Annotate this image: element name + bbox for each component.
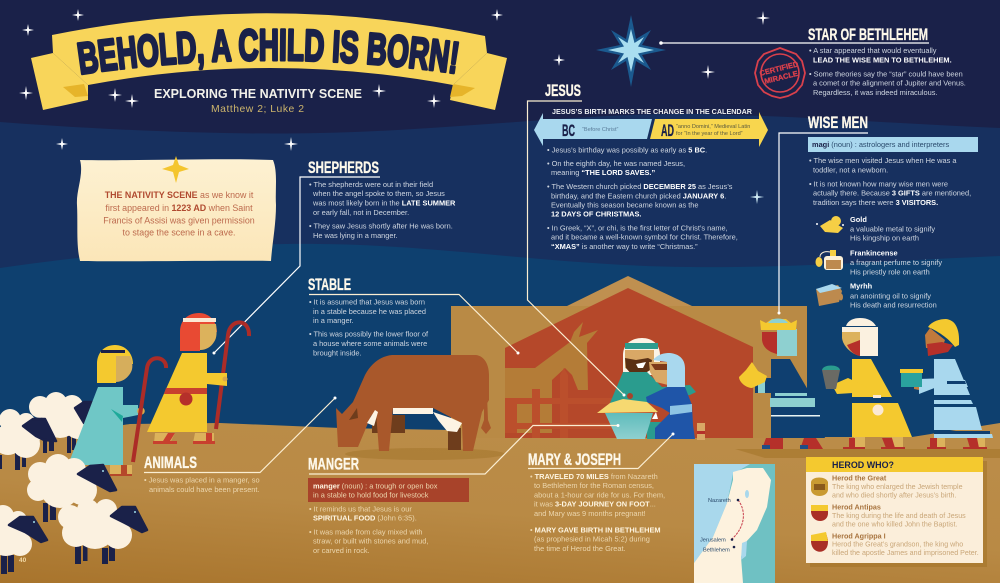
arm	[919, 378, 968, 394]
Herod the Great: The king who enlarged the Jewish temple	[832, 483, 963, 491]
arrow: AD: for “In the year of the Lord”	[676, 131, 743, 137]
red interior wall	[505, 288, 753, 438]
feet	[110, 465, 132, 476]
panel: Mary and Joseph text: to Bethlehem for the Roman census,	[534, 481, 654, 490]
map: Bethlehem	[703, 548, 730, 554]
belt	[670, 404, 692, 415]
panel: manger text: straw, or built with stones and mud,	[313, 536, 428, 546]
panel: wise men text: • It is not known how many wise men were	[809, 180, 948, 188]
panel: stable text: • It is assumed that Jesus was born	[309, 298, 425, 306]
sheep bottom-left	[0, 505, 47, 574]
panel: star of Bethlehem text: • A star appeared that would eventually	[809, 46, 937, 55]
sandal	[697, 423, 705, 440]
shadow	[810, 461, 987, 567]
robe	[68, 387, 123, 465]
banner left tail	[31, 53, 88, 110]
sheep front bottom-right	[58, 499, 147, 564]
panel: Herod who: HEROD WHO?	[832, 460, 894, 470]
staff	[133, 358, 166, 462]
gold: His kingship on earth	[850, 234, 919, 242]
wise man 3 blue	[900, 319, 993, 449]
panel: shepherds text: He was lying in a manger.	[313, 231, 398, 240]
panel: shepherds text	[308, 158, 456, 240]
Jesus bullet text	[547, 146, 738, 251]
manger definition box	[308, 478, 469, 502]
robe	[610, 372, 696, 403]
subtitle: EXPLORING THE NATIVITY SCENE	[154, 86, 362, 101]
arrow: BC: “Before Christ”	[582, 127, 619, 133]
panel: stable text: in a stable because he was placed	[313, 307, 426, 316]
panel: star of Bethlehem text: Regardless, it was indeed miraculous.	[813, 88, 937, 97]
myrrh: Myrhh	[850, 282, 873, 290]
Jesus bullet text: birthday, and the Eastern church picked JANUARY 6.	[551, 192, 726, 200]
panel: manger text: in a stable to hold food for livestock	[313, 490, 429, 500]
leader: star	[661, 42, 929, 44]
Jesus bullet text: “XMAS” is another way to write “Christmas.”	[551, 242, 698, 251]
panel: star of Bethlehem text: • Some theories say the “star” could have been	[809, 70, 963, 78]
panel: wise men text: magi (noun) : astrologers and interpreters	[812, 140, 950, 149]
gift	[822, 370, 840, 389]
arrow: BC: BC	[562, 121, 575, 140]
gold: a valuable metal to signify	[850, 224, 935, 234]
sheep front middle	[27, 454, 116, 522]
panel: shepherds text: or early fall, not in December.	[313, 208, 409, 217]
small stars	[19, 9, 770, 204]
panel: animals text: • Jesus was placed in a manger, so	[144, 476, 260, 484]
arm	[832, 378, 867, 394]
dead sea	[741, 541, 747, 560]
frankincense: a fragrant perfume to signify	[850, 258, 942, 267]
Herod Agrippa I: killed the apostle James and imprisoned Peter.	[832, 549, 979, 557]
hand	[137, 407, 145, 415]
myrrh: His death and resurrection	[850, 300, 937, 310]
cow ground shadow	[345, 448, 505, 460]
feet	[854, 437, 903, 447]
icon: head	[811, 505, 828, 521]
scripture reference: Matthew 2; Luke 2	[211, 104, 304, 115]
veil	[653, 353, 685, 388]
banner main ribbon	[52, 13, 487, 85]
panel: Mary and Joseph text: it was 3-DAY JOURNEY ON FOOT...	[534, 500, 656, 508]
leader: Mary and Joseph	[528, 434, 673, 468]
arrow: AD: AD	[661, 121, 674, 140]
panel: stable text: brought inside.	[313, 348, 361, 358]
Herod Antipas: The king during the life and death of Jesus	[832, 512, 966, 520]
panel: stable text	[308, 275, 429, 358]
gold: Gold	[850, 215, 867, 224]
panel: wise men text: WISE MEN	[808, 113, 868, 132]
robe	[934, 359, 970, 395]
panel: star of Bethlehem text: a comet or the alignment of Jupiter and Venus.	[813, 78, 966, 88]
panel: star of Bethlehem text	[808, 25, 966, 97]
head	[846, 318, 876, 326]
icon: myrrh oil jar	[816, 284, 843, 306]
feet	[762, 438, 823, 449]
Jesus bullet text: 12 DAYS OF CHRISTMAS.	[551, 210, 641, 218]
panel: animals text: animals could have been present.	[149, 485, 260, 494]
leader: stable	[309, 294, 518, 353]
panel: manger text: MANGER	[308, 454, 359, 474]
scroll text: first appeared in 1223 AD when Saint	[105, 203, 253, 213]
head	[180, 313, 217, 351]
leader: manger	[309, 426, 618, 474]
panel: stable text: in a manger.	[313, 316, 354, 325]
panel: Mary and Joseph text: (as prophesied in Micah 5:2) during	[534, 534, 650, 544]
scroll text	[103, 190, 255, 238]
frankincense	[816, 248, 942, 276]
Jesus bullet text: • In Greek, “X”, or chi, is the first letter of Christ’s name,	[547, 224, 728, 232]
page number: 40	[19, 557, 27, 564]
panel: wise men text: • The wise men visited Jesus when He was a	[809, 156, 957, 165]
robe	[771, 359, 825, 438]
panel: shepherds text: • They saw Jesus shortly after He was born.	[309, 222, 453, 230]
Joseph	[610, 338, 696, 403]
panel: stable text: STABLE	[308, 275, 351, 294]
panel: wise men text: tradition says there were 3 VISITORS.	[813, 198, 938, 207]
panel: manger text: • It reminds us that Jesus is our	[309, 504, 412, 514]
shepherd in yellow robe	[147, 313, 249, 444]
panel: stable text: a house where some animals were	[313, 339, 427, 348]
cow ear	[349, 408, 358, 420]
wise men figures	[735, 318, 1000, 458]
staff	[216, 322, 249, 429]
sheep mid-left	[0, 409, 56, 470]
banner right tail	[450, 53, 507, 110]
magi definition box	[808, 137, 978, 152]
headscarf	[623, 338, 660, 375]
scroll text: to stage the scene in a cave.	[123, 228, 235, 238]
horse silhouette	[505, 322, 598, 433]
cow	[336, 355, 505, 460]
map	[694, 464, 775, 583]
title text: BEHOLD, A CHILD IS BORN!	[76, 28, 460, 76]
Herod Agrippa I: Herod Agrippa I	[832, 532, 886, 540]
sea	[694, 464, 750, 563]
robe	[147, 353, 207, 432]
Herod the Great	[811, 474, 963, 500]
panel: wise men text	[808, 113, 978, 310]
panel: Mary and Joseph text: and Mary was 9 months pregnant!	[534, 509, 646, 518]
wise man 2 yellow	[822, 318, 912, 449]
panel: Jesus: JESUS	[545, 81, 581, 100]
panel: Mary and Joseph text: MARY & JOSEPH	[528, 450, 621, 469]
leader: wise men	[779, 133, 868, 313]
panel: shepherds text: when the angel spoke to them, so Jesus	[312, 189, 445, 198]
leader: shepherds	[214, 177, 380, 353]
icon: head	[811, 478, 828, 496]
Herod Antipas	[811, 502, 966, 528]
far legs	[372, 415, 461, 450]
robe	[852, 359, 912, 437]
icon: certified miracle seal	[755, 48, 805, 98]
leader: animals	[144, 398, 335, 472]
banner folds	[63, 84, 475, 97]
fence	[505, 368, 612, 438]
map: Jerusalem	[700, 538, 726, 544]
belt	[164, 388, 207, 394]
panel: Jesus	[534, 81, 768, 251]
belly white	[367, 408, 462, 432]
Herod the Great: Herod the Great	[832, 474, 887, 482]
panel: wise men text: actually there. Because 3 GIFTS are mentioned,	[813, 188, 971, 198]
panel: Mary and Joseph text: the time of Herod the Great.	[534, 544, 626, 553]
panel: manger text: manger (noun) : a trough or open box	[313, 482, 438, 490]
map: Nazareth	[708, 498, 731, 504]
panel: Mary and Joseph text: • MARY GAVE BIRTH IN BETHLEHEM	[530, 526, 661, 534]
pouch	[180, 392, 192, 406]
cities	[737, 499, 739, 501]
panel: manger text	[308, 454, 469, 555]
Herod Agrippa I	[811, 532, 979, 557]
shepherd in teal robe	[68, 345, 166, 476]
arrow: AD: “anno Domini,” Medieval Latin	[676, 124, 750, 130]
Herod Antipas: Herod Antipas	[832, 502, 881, 512]
panel: Herod who	[806, 457, 987, 567]
panel: manger text: or carved in rock.	[313, 546, 370, 555]
leader: Jesus	[528, 101, 624, 395]
Jesus bullet text: • Jesus’s birthday was possibly as early as 5 BC.	[547, 146, 707, 154]
gift	[900, 369, 923, 373]
panel: Mary and Joseph text: • TRAVELED 70 MILES from Nazareth	[530, 472, 658, 481]
icon: scroll star	[162, 156, 189, 183]
wise man 1 navy	[739, 318, 825, 449]
panel: nativity scene scroll	[77, 156, 276, 261]
panel: animals text: ANIMALS	[144, 453, 197, 472]
beard	[625, 358, 652, 375]
panel: stable building	[451, 276, 807, 438]
header	[806, 457, 983, 472]
gold	[816, 215, 935, 242]
icon: gold	[816, 216, 844, 233]
roof	[567, 276, 692, 306]
frankincense: His priestly role on earth	[850, 268, 930, 276]
feet	[154, 433, 214, 443]
panel: shepherds text: was most likely born in the LATE SUMMER	[312, 198, 456, 208]
Herod the Great: and who died shortly after Jesus’s birth.	[832, 492, 956, 500]
feet	[937, 437, 985, 447]
myrrh: an anointing oil to signify	[850, 292, 931, 300]
robe	[646, 387, 695, 439]
arrow: AD	[650, 112, 768, 147]
panel: shepherds text: • The shepherds were out in their field	[309, 180, 433, 189]
Herod Agrippa I: Herod the Great’s grandson, the king who	[832, 540, 963, 548]
gift bowl	[739, 362, 767, 388]
body	[336, 355, 489, 451]
Mary	[646, 353, 705, 440]
head	[762, 332, 777, 354]
Herod Antipas: and the one who killed John the Baptist.	[832, 520, 957, 528]
frankincense: Frankincense	[850, 248, 898, 258]
panel: star of Bethlehem text: LEAD THE WISE MEN TO BETHLEHEM.	[813, 56, 952, 64]
icon: certified miracle seal: CERTIFIED	[759, 59, 800, 78]
manger with straw	[597, 393, 658, 439]
face	[649, 362, 668, 385]
teal under	[647, 422, 662, 439]
myrrh	[816, 282, 937, 310]
scroll text: Francis of Assisi was given permission	[103, 216, 255, 226]
turban	[928, 319, 959, 347]
panel: manger text: • It was made from clay mixed with	[309, 528, 422, 536]
panel: Mary and Joseph text: about a 1-hour car ride for us. For them,	[534, 490, 665, 500]
leader dots	[212, 41, 780, 435]
face	[625, 350, 654, 375]
panel: wise men text: toddler, not a newborn.	[813, 166, 888, 174]
panel: stable text: • This was possibly the lower floor of	[309, 330, 429, 338]
head	[925, 328, 945, 348]
Jesus bullet text: • On the eighth day, he was named Jesus,	[547, 159, 685, 168]
panel: star of Bethlehem text: STAR OF BETHLEHEM	[808, 25, 928, 44]
crown	[760, 319, 797, 330]
panel: Mary and Joseph text	[528, 450, 665, 553]
icon: star of Bethlehem	[596, 15, 666, 87]
icon: certified miracle seal: MIRACLE	[763, 69, 799, 86]
arm	[755, 378, 772, 393]
panel: manger text: SPIRITUAL FOOD (John 6:35).	[313, 514, 417, 522]
icon: frankincense bottle	[816, 250, 843, 270]
Jesus bullet text: • The Western church picked DECEMBER 25 as Jesus’s	[547, 182, 733, 191]
holy family	[597, 338, 705, 440]
scroll text: THE NATIVITY SCENE as we know it	[105, 190, 254, 200]
title banner	[31, 13, 507, 110]
calendar heading: JESUS’S BIRTH MARKS THE CHANGE IN THE CALENDAR	[552, 107, 752, 116]
panel: animals text	[144, 453, 260, 494]
head hood	[97, 345, 133, 383]
lake	[745, 490, 749, 498]
panel: shepherds text: SHEPHERDS	[308, 158, 379, 177]
Jesus bullet text: and it became a well-known symbol for Christ. Therefore,	[551, 232, 738, 242]
route	[732, 500, 743, 539]
land	[694, 468, 771, 583]
icon: head	[811, 533, 828, 552]
tail	[481, 395, 491, 434]
arrow: BC	[534, 113, 652, 146]
ground shadow	[735, 449, 1000, 458]
subtitle	[154, 86, 362, 115]
sheep back	[29, 392, 92, 453]
Jesus bullet text: meaning “THE LORD SAVES.”	[551, 168, 655, 177]
Jesus bullet text: Eventually this season became known as the	[551, 201, 698, 210]
sheep group	[0, 313, 249, 574]
